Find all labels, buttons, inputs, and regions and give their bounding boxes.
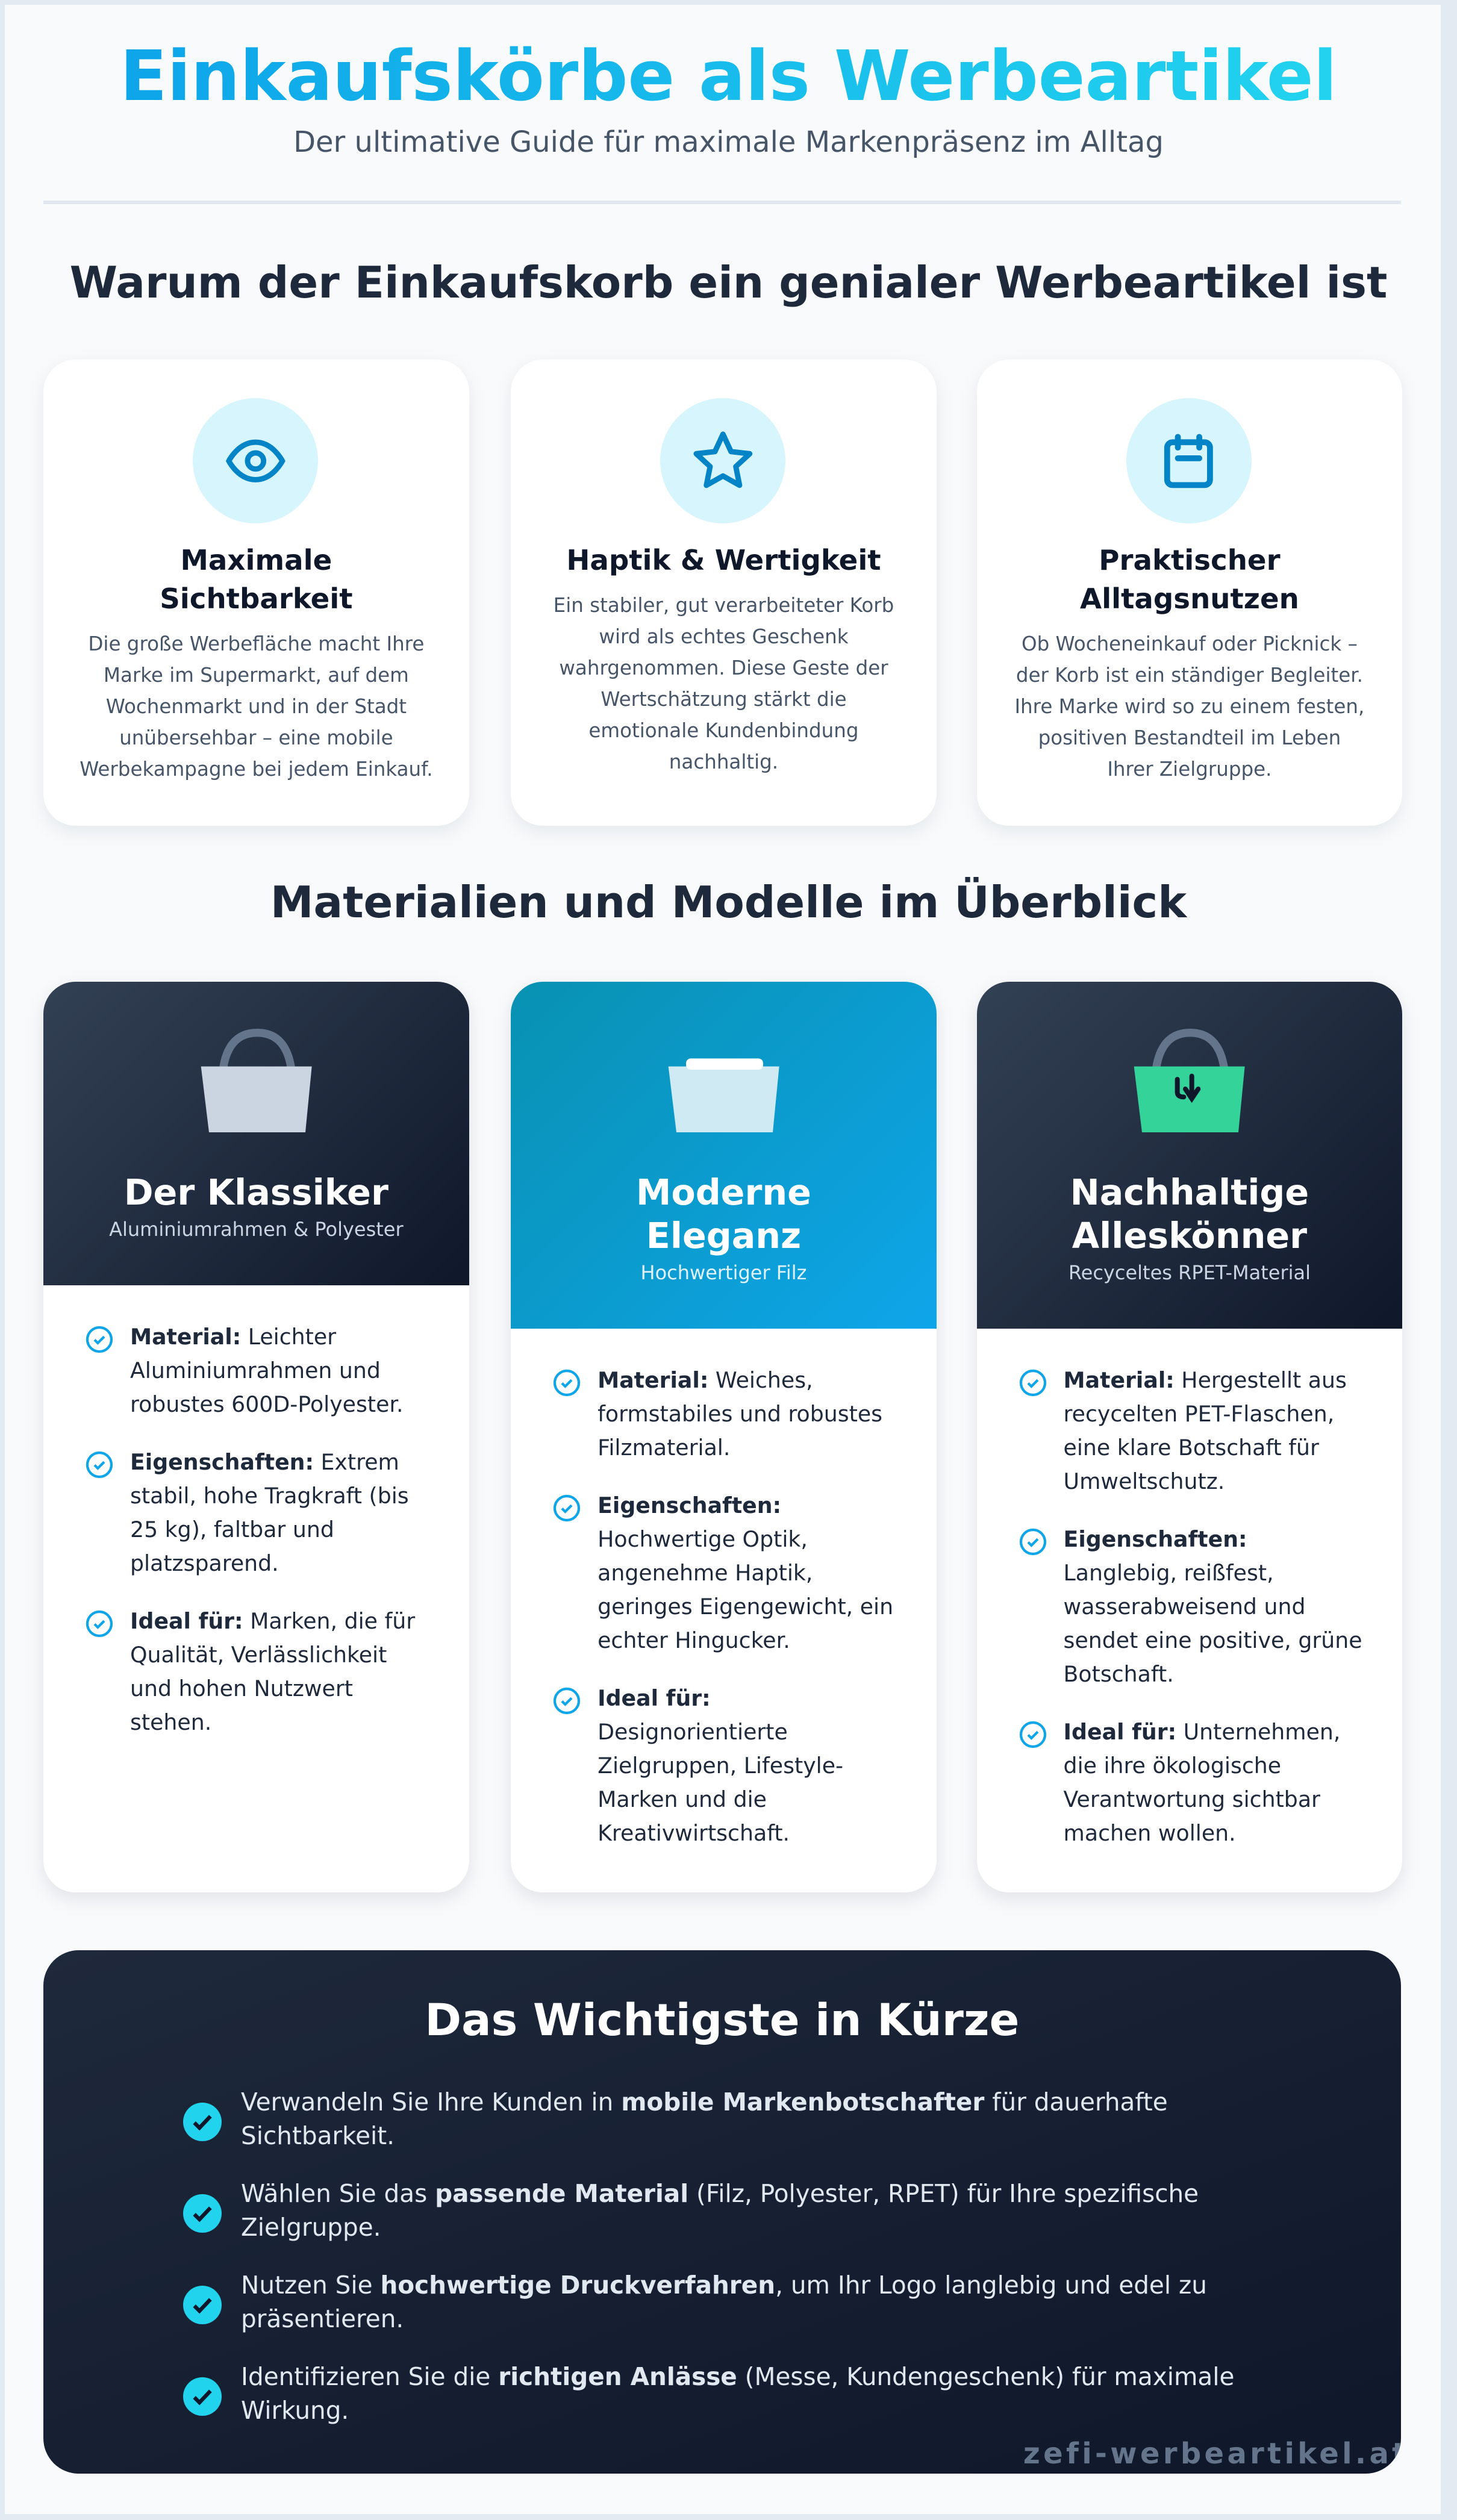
card: alltagsnutzen bbox=[977, 360, 1402, 826]
heading: materialien: Materialien und Modelle im Überblick bbox=[270, 877, 1187, 928]
header: Eleganz bbox=[646, 1215, 801, 1256]
material card: rpet bbox=[977, 982, 1402, 1892]
list bbox=[86, 1324, 416, 1735]
summary item 4: Identifizieren Sie die richtigen Anlässe (Messe, Kundengeschenk) für maximale bbox=[241, 2362, 1234, 2391]
card title bbox=[160, 544, 353, 616]
header bbox=[511, 982, 937, 1329]
list bbox=[1019, 1367, 1362, 1846]
card text: Ein stabiler, gut verarbeiteter Korb wird als echtes Geschenk wahrgenommen. Diese Geste der Wertschätzung stärkt die emotionale Kundenbindung nachhaltig. bbox=[554, 594, 894, 773]
header bbox=[43, 982, 469, 1285]
list: Material: Weiches, formstabiles und robustes Filzmaterial. bbox=[597, 1367, 882, 1461]
header: Moderne bbox=[636, 1172, 811, 1213]
list bbox=[553, 1367, 893, 1846]
card text: Ob Wocheneinkauf oder Picknick – der Korb ist ein ständiger Begleiter. Ihre Marke wird so zu einem festen, positiven Bestandteil im Leben bbox=[1014, 632, 1364, 749]
heading: warum: Warum der Einkaufskorb ein genialer Werbeartikel ist bbox=[70, 257, 1387, 308]
list: Material: Hergestellt aus recycelten PET-Flaschen, eine klare Botschaft für Umweltschutz. bbox=[1064, 1367, 1347, 1494]
header: Nachhaltige bbox=[1070, 1172, 1309, 1213]
summary panel bbox=[43, 1950, 1401, 2474]
summary item 1 bbox=[183, 2088, 1168, 2150]
header bbox=[977, 982, 1402, 1329]
header: Der Klassiker bbox=[124, 1172, 388, 1213]
list: Ideal für: Designorientierte Zielgruppen, Lifestyle-Marken und die Kreativwirtschaft. bbox=[597, 1685, 843, 1846]
icon: green basket bbox=[1134, 1029, 1245, 1132]
icon: star bbox=[660, 398, 785, 523]
card: sichtbarkeit bbox=[43, 360, 469, 826]
list: Ideal für: Unternehmen, die ihre ökologische Verantwortung sichtbar machen wollen. bbox=[1064, 1719, 1340, 1846]
header: Hochwertiger Filz bbox=[641, 1261, 806, 1284]
header: Recyceltes RPET-Material bbox=[1069, 1261, 1311, 1284]
card title bbox=[1080, 544, 1299, 616]
icon: calendar bbox=[1126, 398, 1252, 523]
summary item 1: Sichtbarkeit. bbox=[241, 2121, 395, 2150]
list: Eigenschaften: bbox=[1064, 1526, 1247, 1552]
summary title: Das Wichtigste in Kürze bbox=[425, 1995, 1019, 2046]
summary item 2: Zielgruppe. bbox=[241, 2213, 381, 2242]
summary item 2 bbox=[183, 2179, 1199, 2242]
material card: filz bbox=[511, 982, 937, 1892]
card text: Die große Werbefläche macht Ihre Marke im Supermarkt, auf dem Wochenmarkt und in der Stadt unübersehbar – eine mobile Werbekampagne bei jedem Einkauf. bbox=[80, 632, 433, 781]
material card: klassiker bbox=[43, 982, 469, 1892]
card title: Praktischer bbox=[1099, 544, 1281, 577]
header: Aluminiumrahmen & Polyester bbox=[109, 1218, 404, 1241]
list: Eigenschaften: Hochwertige Optik, angenehme Haptik, geringes Eigengewicht, ein echter Hingucker. bbox=[597, 1492, 893, 1653]
summary item 4: Wirkung. bbox=[241, 2396, 349, 2425]
list: Langlebig, reißfest, wasserabweisend und sendet eine positive, grüne Botschaft. bbox=[1064, 1560, 1362, 1687]
watermark: zefi-werbeartikel.at bbox=[1023, 2437, 1401, 2471]
summary item 1: Verwandeln Sie Ihre Kunden in mobile Markenbotschafter für dauerhafte bbox=[241, 2088, 1168, 2116]
header: Alleskönner bbox=[1072, 1215, 1307, 1256]
title: Einkaufskörbe als Werbeartikel bbox=[120, 37, 1337, 117]
icon: felt basket bbox=[669, 1058, 779, 1132]
subtitle: Der ultimative Guide für maximale Markenpräsenz im Alltag bbox=[293, 125, 1164, 159]
icon: basket bbox=[201, 1029, 312, 1132]
summary item 4 bbox=[183, 2362, 1234, 2425]
summary item 2: Wählen Sie das passende Material (Filz, Polyester, RPET) für Ihre spezifische bbox=[241, 2179, 1199, 2208]
list: Material: Leichter Aluminiumrahmen und robustes 600D-Polyester. bbox=[130, 1324, 404, 1417]
icon: eye bbox=[193, 398, 318, 523]
list: Ideal für: Marken, die für Qualität, Verlässlichkeit und hohen Nutzwert stehen. bbox=[130, 1608, 415, 1735]
card title: Sichtbarkeit bbox=[160, 583, 353, 616]
summary item 3: präsentieren. bbox=[241, 2304, 404, 2333]
card: haptik bbox=[511, 360, 937, 826]
card title: Haptik & Wertigkeit bbox=[566, 544, 881, 577]
summary item 3: Nutzen Sie hochwertige Druckverfahren, um Ihr Logo langlebig und edel zu bbox=[241, 2271, 1207, 2300]
list: Eigenschaften: Extrem stabil, hohe Tragkraft (bis 25 kg), faltbar und platzsparend. bbox=[130, 1449, 409, 1576]
summary item 3 bbox=[183, 2271, 1207, 2333]
card title: Maximale bbox=[181, 544, 332, 577]
card text: Ihrer Zielgruppe. bbox=[1107, 758, 1272, 781]
card title: Alltagsnutzen bbox=[1080, 583, 1299, 616]
